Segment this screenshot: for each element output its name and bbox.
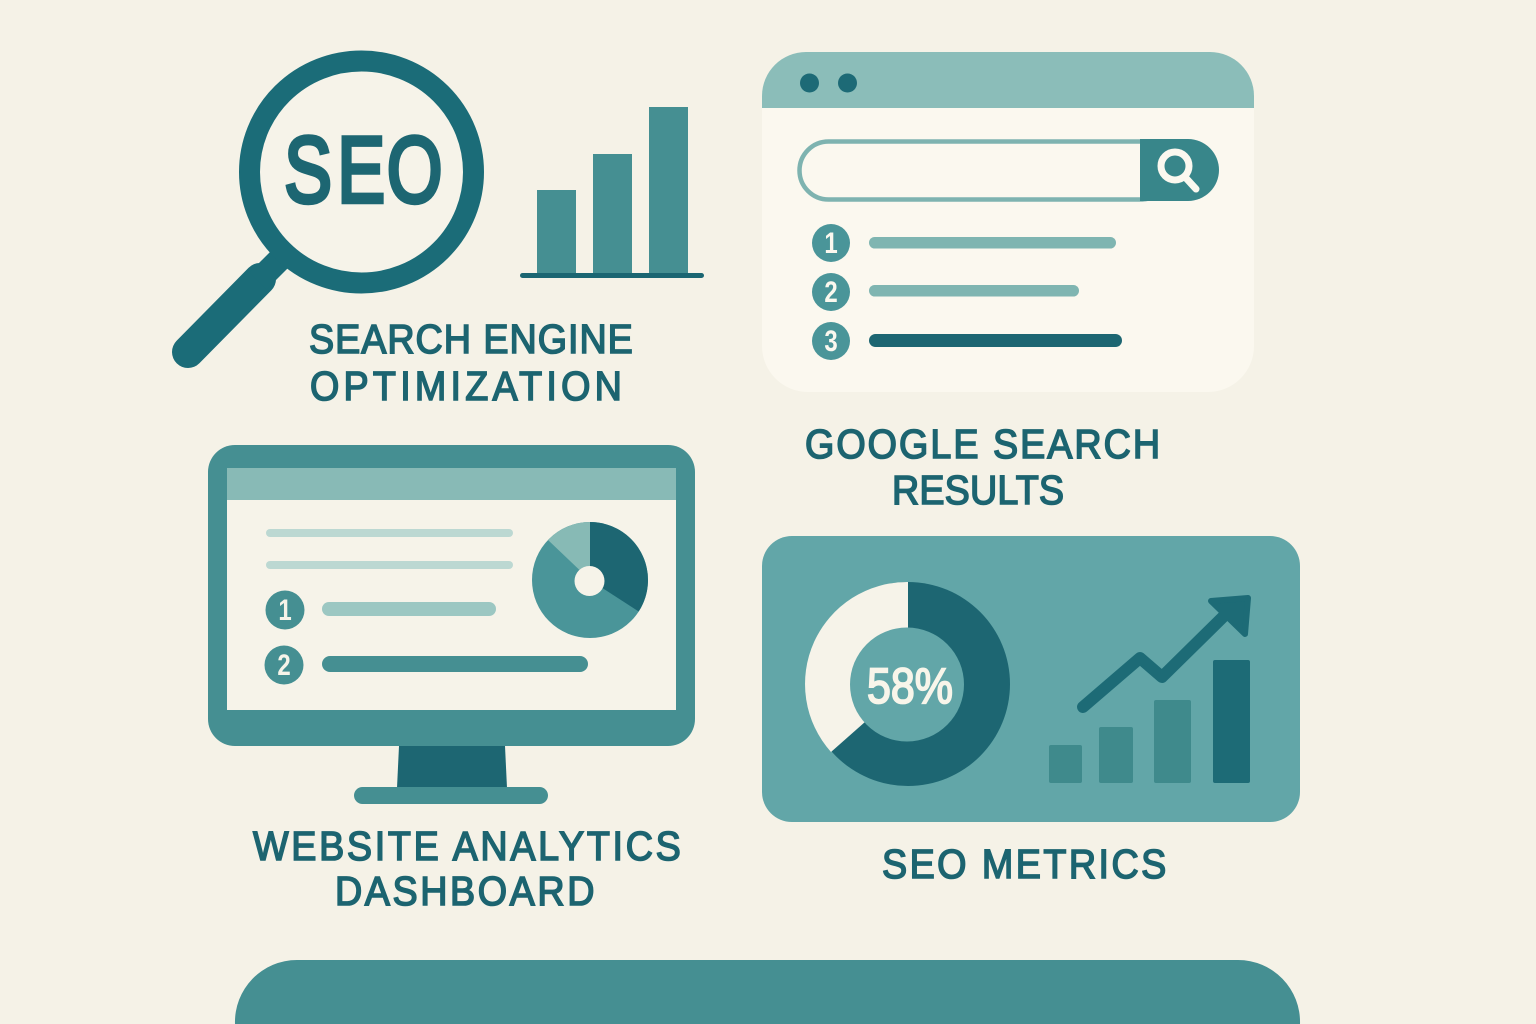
ranked row 1: 1 (278, 592, 292, 627)
heading: website analytics dashboard: WEBSITE ANALYTICS (253, 824, 681, 869)
bar chart: rising bars (520, 107, 704, 278)
monitor base (354, 787, 548, 804)
browser title bar (762, 52, 1254, 108)
monitor screen (227, 468, 676, 710)
metrics card background (762, 536, 1300, 822)
panel: website analytics dashboard monitor (208, 445, 695, 804)
monitor stand (397, 746, 507, 788)
panel: google search results browser window (762, 52, 1254, 392)
donut chart 58% (805, 582, 1010, 786)
heading: website analytics dashboard: DASHBOARD (335, 869, 594, 914)
search result 2: 2 (824, 274, 838, 309)
search result 1 (812, 224, 1116, 262)
search result 1: 1 (824, 225, 838, 260)
heading: search engine optimization: SEARCH ENGINE (309, 317, 633, 362)
monitor frame (208, 445, 695, 746)
donut chart 58%: 58% (867, 658, 953, 714)
icon: magnifying glass with SEO (188, 61, 474, 352)
heading: seo metrics: SEO METRICS (882, 842, 1166, 887)
search result 2 (812, 273, 1079, 311)
search bar (800, 139, 1219, 201)
ranked row 2 (264, 646, 588, 684)
screen header bar (227, 468, 676, 500)
panel: seo metrics (762, 536, 1300, 822)
search result 3 (812, 322, 1122, 360)
heading: google search results (805, 422, 1160, 513)
ranked row 2: 2 (277, 647, 291, 682)
browser window body (762, 52, 1254, 392)
browser window dots (800, 74, 857, 92)
heading: google search results: GOOGLE SEARCH (805, 422, 1160, 467)
arrow: upward trend (1083, 598, 1248, 707)
icon: magnifying glass with SEO: SEO (284, 116, 442, 222)
panel: search engine optimization (188, 61, 704, 409)
bar chart: growth bars (1049, 660, 1250, 783)
heading: search engine optimization: OPTIMIZATION (310, 364, 622, 409)
text placeholder lines (266, 529, 513, 569)
ranked row 1 (266, 590, 496, 630)
heading: website analytics dashboard (253, 824, 681, 914)
search result 3: 3 (824, 323, 838, 358)
heading: search engine optimization (309, 317, 633, 409)
panel: bottom banner (235, 960, 1300, 1024)
pie chart (532, 522, 648, 638)
heading: google search results: RESULTS (892, 468, 1064, 513)
